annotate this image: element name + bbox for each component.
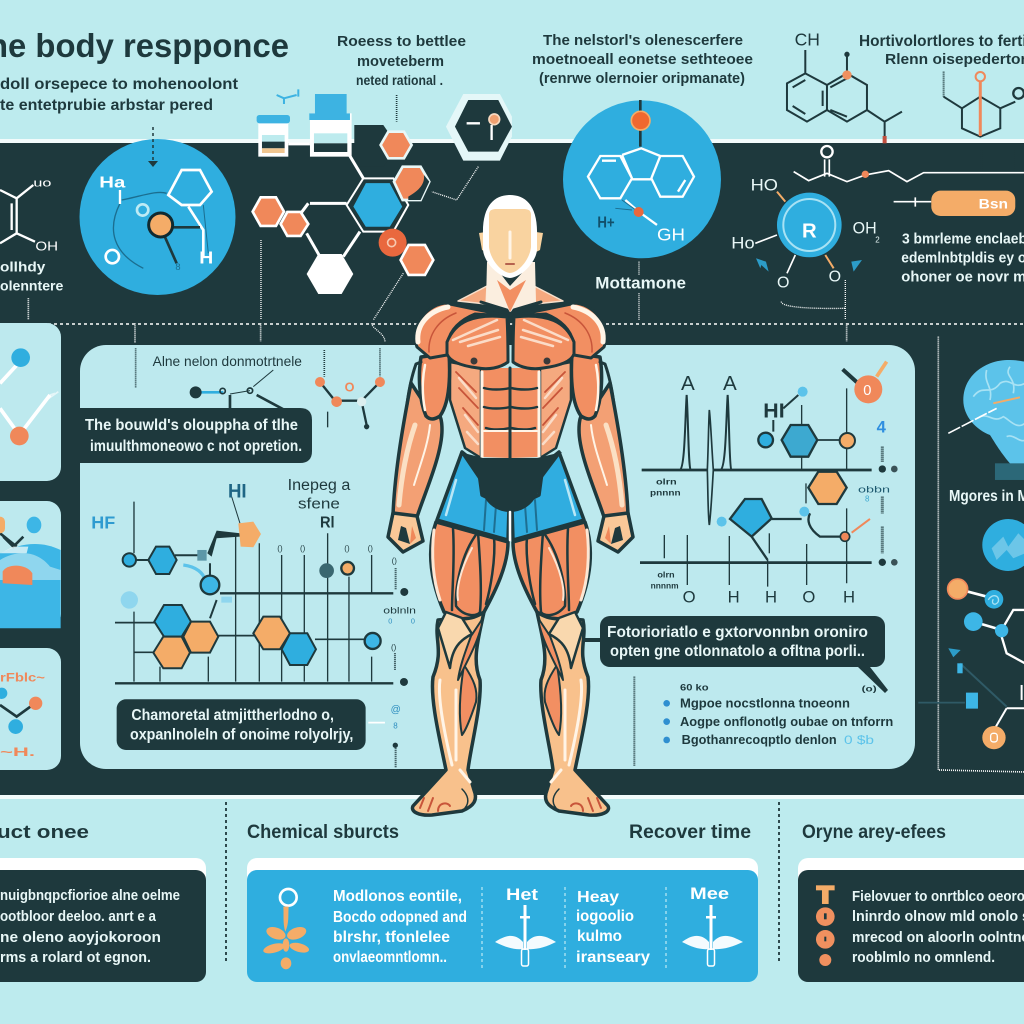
forearm: [393, 383, 442, 517]
molecule: left partial ring: [0, 178, 64, 320]
abs: [481, 368, 510, 458]
chart labels A and O H: [681, 372, 855, 607]
chest: [447, 316, 508, 369]
callout: chemical: Chamoretal atmjittherlodno o,: [131, 707, 334, 724]
bullet list: Aogpe onflonotlg oubae on tnforrn: [680, 714, 893, 729]
chart: right spectrum: nnnnm: [651, 580, 679, 590]
card: chemical structures: blrshr, tfonlelee: [333, 929, 450, 946]
card: chemical structures: [247, 858, 758, 982]
legs and arms (left half): [388, 286, 510, 815]
bullet list: 0 $b: [844, 733, 874, 747]
callout: right: [583, 616, 888, 693]
molecule: R core with chain: [731, 146, 1024, 291]
upper arm: [419, 353, 450, 419]
molecule: R core with chain: HO: [751, 176, 778, 195]
bullet list: [634, 677, 893, 767]
lower leg: [412, 612, 484, 815]
card: chemical structures: iogoolio: [576, 908, 634, 925]
chart: left lattice: (): [368, 544, 373, 553]
panel: left lower: ~H.: [0, 745, 35, 759]
card: other effects: [798, 858, 1024, 982]
molecule: left partial ring: olenntere: [0, 278, 64, 294]
thigh: [431, 522, 508, 619]
chart: right spectrum: 8: [865, 495, 870, 504]
subtitle: [0, 76, 239, 114]
blue circle: molecule right: GH: [657, 225, 685, 245]
subtitle: te entetprubie arbstar pered: [0, 97, 213, 114]
top note: relation: [532, 32, 753, 87]
chart: left lattice: [115, 497, 416, 768]
card: chemical structures: Modlonos eontile,: [333, 888, 462, 905]
label capsule: Bsn: [979, 196, 1008, 212]
top note: relation: moetnoeall eonetse sethteoee: [532, 51, 753, 68]
molecule: ring with orange marker: [944, 72, 1024, 177]
knee: [438, 612, 472, 668]
neck: [486, 262, 536, 312]
molecule: R core with chain: R: [802, 219, 817, 242]
chart labels A and O H: O: [683, 588, 696, 607]
top-left panel annotations: [135, 323, 385, 409]
card: chemical structures: kulmo: [577, 928, 622, 945]
chart: left lattice: (): [344, 544, 350, 553]
chart: right spectrum: 4: [877, 418, 887, 437]
figure: muscular human body: [388, 195, 633, 815]
molecule: R core with chain: OH: [853, 218, 877, 237]
label: motamone: [595, 262, 845, 320]
blue circle: molecule right: [563, 100, 721, 258]
molecule: R core with chain: Ho: [731, 233, 755, 252]
chart: right spectrum: olrn: [657, 569, 675, 579]
chart: left lattice: 8: [393, 721, 398, 730]
chart: left lattice: (): [300, 544, 306, 553]
chart: left lattice: (): [391, 643, 397, 652]
chart labels A and O H: H: [728, 588, 740, 607]
chart labels A and O H: HI: [763, 400, 785, 422]
label: motamone: Mottamone: [595, 273, 686, 292]
chart: right spectrum: pnnnn: [650, 488, 681, 498]
section header: recovery: Recover time: [629, 822, 751, 843]
callout: top left: The bouwld's olouppha of tlhe: [85, 417, 298, 434]
top note: recess: neted rational .: [356, 72, 443, 88]
panel: left middle: [0, 501, 61, 628]
molecule: fused rings top: CH: [795, 29, 820, 49]
bullet list: Mgpoe nocstlonna tnoeonn: [680, 696, 850, 711]
head: [479, 195, 543, 278]
chart: right spectrum: olrn: [656, 476, 677, 486]
bullet list: 60 ko: [680, 683, 709, 693]
panel: left lower: [0, 648, 61, 770]
section header: chemical: Chemical sburcts: [247, 822, 399, 843]
icon: hexagon badge: [446, 94, 512, 161]
callout: top left: imuulthmoneowo c not opretion.: [90, 438, 302, 455]
card: chemical structures: Het: [506, 885, 538, 904]
top note: recess: moveteberm: [357, 53, 444, 70]
chart labels A and O H: H: [765, 588, 777, 607]
molecule: R core with chain: 2: [875, 236, 880, 245]
chart labels: HI: [228, 481, 247, 502]
molecule: left partial ring: ollhdy: [0, 259, 46, 275]
panel: central: [80, 345, 915, 769]
top note: relation: (renrwe olernoier oripmanate): [539, 70, 745, 87]
chart labels A and O H: H: [843, 588, 855, 607]
bullet list: Bgothanrecoqptlo denlon: [682, 732, 837, 747]
top note: relation: The nelstorl's olenescerfere: [543, 32, 743, 49]
chart labels: Inepeg a: [288, 477, 351, 494]
chart: left lattice: @: [391, 705, 401, 716]
chart labels: [91, 477, 351, 532]
blue circle: molecule left: H: [199, 247, 213, 267]
panel: right dark with brain: [847, 323, 1024, 772]
chart: left lattice: (): [392, 556, 397, 565]
deltoid: [415, 303, 508, 358]
panel: left top: [0, 323, 61, 481]
top note: hormones: Rlenn oisepederton: [885, 51, 1024, 68]
chart labels: HF: [91, 512, 115, 532]
icon: orange stack: [816, 885, 835, 966]
top note: hormones: [859, 33, 1024, 68]
card: product: [0, 858, 206, 982]
card: product: ne oleno aoyjokoroon: [0, 929, 161, 946]
chart labels: Rl: [320, 514, 335, 531]
card: chemical structures: Bocdo odopned and: [333, 909, 467, 926]
callout: right: opten gne otlonnatolo a ofltna porli..: [610, 643, 865, 660]
blue circle: molecule left: 8: [175, 262, 181, 272]
bottles: [257, 89, 352, 157]
chart: right spectrum: obbn: [858, 484, 890, 494]
card: chemical structures: Heay: [577, 889, 619, 906]
top note: recess: [337, 33, 466, 88]
molecule: R core with chain: O: [777, 274, 789, 291]
chart labels A and O H: O: [802, 588, 815, 607]
molecule: left partial ring: OH: [35, 239, 58, 254]
callout: right: Fotorioriatlo e gxtorvonnbn oroniro: [607, 624, 868, 641]
label capsule: [894, 191, 1015, 216]
chart labels A and O H: A: [723, 372, 737, 395]
trunk and briefs: [460, 452, 562, 512]
top-left panel annotations: Alne nelon donmotrtnele: [153, 353, 302, 369]
blue circle: molecule right: H+: [597, 214, 615, 231]
calf muscle: [460, 665, 476, 735]
hand: [388, 513, 423, 552]
text block: right dark: ohoner oe novr m: [901, 270, 1024, 286]
dotted arrow into blue circle: [148, 127, 158, 167]
text block: right dark: [901, 231, 1024, 286]
small orange molecule: [315, 377, 385, 429]
chart labels: sfene: [298, 496, 340, 512]
callout: chemical: [117, 699, 366, 750]
molecule: fused rings top: [787, 29, 902, 143]
card: chemical structures: Mee: [690, 884, 729, 903]
card: product: nuigbnqpcfiorioe alne oelme: [0, 887, 180, 904]
serratus flank: [450, 362, 481, 458]
toes: [420, 798, 450, 811]
section header: other: Oryne arey-efees: [802, 822, 946, 843]
icon: winged staff two: [682, 905, 743, 966]
chart: left lattice: 0 0: [388, 616, 415, 625]
icon: winged staff one: [495, 905, 556, 966]
trapezius: [458, 286, 487, 304]
bullet list: (o): [862, 683, 877, 693]
blue circle: molecule left: Ha: [99, 174, 126, 191]
molecule: left partial ring: uo: [33, 178, 51, 190]
top note: recess: Roeess to bettlee: [337, 33, 466, 50]
card: chemical structures: iranseary: [576, 949, 650, 966]
icon: ring with leaves: [262, 889, 310, 969]
card: chemical structures: onvlaeomntlomn..: [333, 949, 447, 966]
right molecules: [918, 519, 1024, 749]
card: product: rms a rolard ot egnon.: [0, 949, 151, 966]
molecule: R core with chain: O: [829, 269, 841, 286]
blue circle: molecule left: [80, 139, 236, 295]
card: product: ootbloor deeloo. anrt e a: [0, 908, 157, 925]
blue shorts: [437, 452, 509, 540]
small orange molecule: O: [345, 381, 355, 395]
chart: right spectrum: 0: [863, 383, 871, 399]
callout: chemical: oxpanlnoleln of onoime rolyolrjy,: [130, 726, 353, 743]
hexagon molecule network: [253, 95, 478, 320]
subtitle: doll orsepece to mohenoolont: [0, 76, 239, 93]
card: other effects: rooblmlo no omnlend.: [852, 949, 995, 966]
chart: right spectrum: [640, 362, 898, 590]
panel: left lower: rFblc~: [0, 671, 45, 685]
chart labels A and O H: A: [681, 372, 695, 395]
chart: left lattice: (): [277, 544, 283, 553]
callout: top left: [79, 408, 312, 463]
chart: left lattice: oblnln: [383, 605, 416, 615]
